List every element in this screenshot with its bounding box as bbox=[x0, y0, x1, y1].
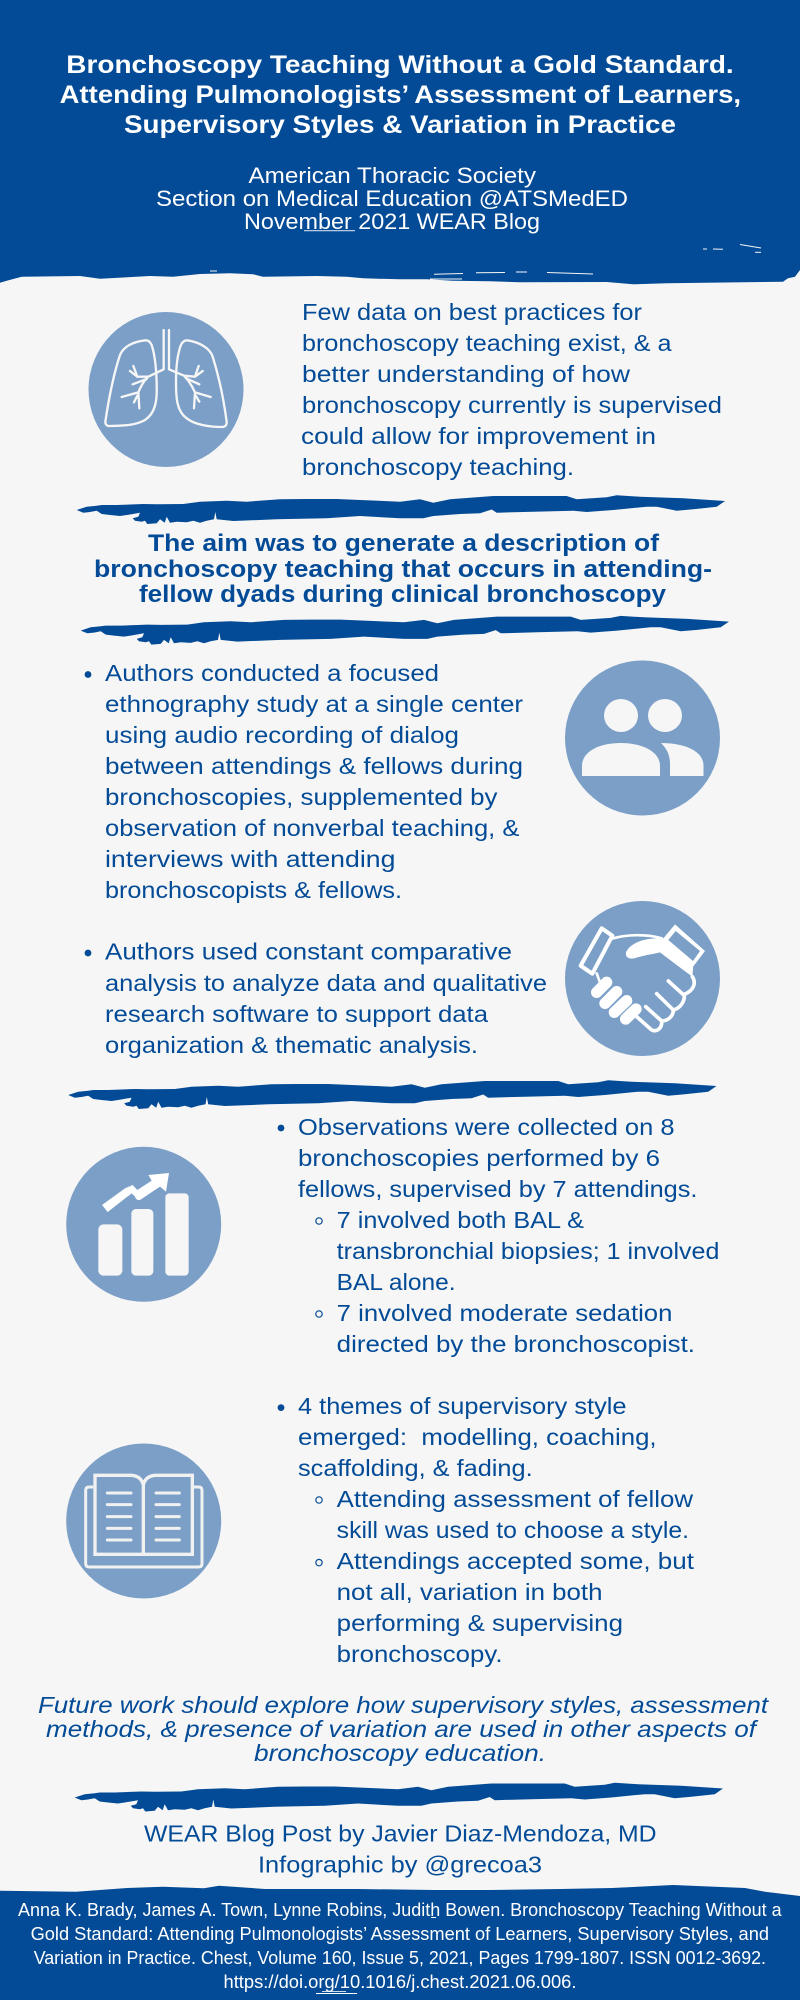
title bbox=[60, 51, 741, 139]
citation text: Gold Standard: Attending Pulmonologists’ Assessment of Learners, Supervisory Styles, and bbox=[31, 1924, 769, 1944]
subtitle: society and date bbox=[156, 163, 628, 234]
results bullet: observations: fellows, supervised by 7 attendings. bbox=[298, 1176, 697, 1202]
icon: open book bbox=[66, 1444, 221, 1598]
results bullet: observations: BAL alone. bbox=[337, 1269, 456, 1295]
methods bullet: analysis bbox=[85, 939, 547, 1058]
divider brush 1 bbox=[77, 495, 725, 524]
results bullet: observations: bronchoscopies performed by 6 bbox=[298, 1145, 660, 1171]
results bullet: themes: Attendings accepted some, but bbox=[337, 1548, 695, 1574]
results bullet: themes: bronchoscopy. bbox=[337, 1641, 502, 1667]
icon: rising bar chart bbox=[66, 1147, 221, 1302]
intro paragraph: bronchoscopy teaching exist, & a bbox=[302, 330, 672, 356]
future work statement: methods, & presence of variation are used in other aspects of bbox=[46, 1716, 759, 1742]
results bullet: themes: skill was used to choose a style. bbox=[337, 1517, 689, 1543]
methods bullet: ethnography: bronchoscopists & fellows. bbox=[105, 877, 402, 903]
future work statement bbox=[38, 1692, 770, 1766]
results bullet: observations: 7 involved moderate sedation bbox=[337, 1300, 672, 1326]
results bullet: themes: not all, variation in both bbox=[337, 1579, 602, 1605]
divider brush 4 bbox=[75, 1783, 723, 1812]
footer background with brushed edge bbox=[0, 1885, 800, 2000]
results bullet: themes bbox=[278, 1393, 695, 1667]
methods bullet: ethnography: bronchoscopies, supplemented by bbox=[105, 784, 498, 810]
results bullet: observations: Observations were collected on 8 bbox=[298, 1114, 674, 1140]
methods bullet: ethnography: interviews with attending bbox=[105, 846, 395, 872]
aim statement: The aim was to generate a description of bbox=[148, 530, 660, 557]
footer citation banner bbox=[0, 1885, 800, 2000]
results bullet: themes: Attending assessment of fellow bbox=[337, 1486, 693, 1512]
intro paragraph: bronchoscopy teaching. bbox=[302, 454, 574, 480]
future work statement: Future work should explore how supervisory styles, assessment bbox=[38, 1692, 770, 1718]
results bullet: themes: performing & supervising bbox=[337, 1610, 623, 1636]
methods section bbox=[85, 660, 720, 1058]
results bullet: themes: scaffolding, & fading. bbox=[298, 1455, 533, 1481]
icon: lungs bbox=[88, 312, 244, 467]
title: Bronchoscopy Teaching Without a Gold Standard. bbox=[66, 51, 734, 79]
results bullet: observations: 7 involved both BAL & bbox=[337, 1207, 584, 1233]
methods bullet: ethnography: observation of nonverbal teaching, & bbox=[105, 815, 519, 841]
header background with brushed edge bbox=[0, 0, 800, 284]
future work statement: bronchoscopy education. bbox=[254, 1740, 546, 1766]
citation text: https://doi.org/10.1016/j.chest.2021.06.006. bbox=[224, 1972, 576, 1992]
divider brush 2 bbox=[81, 616, 729, 645]
results bullet: observations: transbronchial biopsies; 1 involved bbox=[337, 1238, 719, 1264]
citation text: Anna K. Brady, James A. Town, Lynne Robins, Judith Bowen. Bronchoscopy Teaching Without a bbox=[18, 1900, 783, 1920]
credits: Infographic by @grecoa3 bbox=[258, 1852, 542, 1878]
methods bullet: analysis: analysis to analyze data and qualitative bbox=[105, 970, 547, 996]
results bullet: themes: emerged: modelling, coaching, bbox=[298, 1424, 657, 1450]
methods bullet: analysis: Authors used constant comparative bbox=[105, 939, 512, 965]
methods bullet: ethnography: using audio recording of dialog bbox=[105, 722, 459, 748]
citation text bbox=[18, 1900, 783, 1994]
results bullet: observations: directed by the bronchoscopist. bbox=[337, 1331, 695, 1357]
methods bullet: ethnography: between attendings & fellows during bbox=[105, 753, 523, 779]
methods bullet: ethnography: ethnography study at a single center bbox=[105, 691, 523, 717]
results section bbox=[66, 1114, 719, 1667]
intro section bbox=[88, 299, 722, 480]
methods bullet: analysis: organization & thematic analysis. bbox=[105, 1032, 478, 1058]
citation text: Variation in Practice. Chest, Volume 160, Issue 5, 2021, Pages 1799-1807. ISSN 0012-3692. bbox=[34, 1948, 766, 1968]
results bullet: observations bbox=[278, 1114, 719, 1357]
subtitle: society and date: November 2021 WEAR Blog bbox=[244, 209, 540, 234]
credits: WEAR Blog Post by Javier Diaz-Mendoza, MD bbox=[144, 1821, 657, 1847]
title: Supervisory Styles & Variation in Practice bbox=[124, 111, 676, 139]
subtitle: society and date: Section on Medical Education @ATSMedED bbox=[156, 186, 628, 211]
intro paragraph: better understanding of how bbox=[302, 361, 630, 387]
icon: two people bbox=[565, 660, 720, 816]
intro paragraph bbox=[301, 299, 722, 480]
header banner bbox=[0, 0, 800, 284]
title: Attending Pulmonologists’ Assessment of Learners, bbox=[60, 81, 741, 109]
intro paragraph: could allow for improvement in bbox=[301, 423, 656, 449]
aim statement bbox=[94, 530, 712, 608]
results bullet: themes: 4 themes of supervisory style bbox=[298, 1393, 626, 1419]
aim statement: fellow dyads during clinical bronchoscopy bbox=[139, 581, 667, 608]
aim statement: bronchoscopy teaching that occurs in attending- bbox=[94, 556, 712, 583]
methods bullet: ethnography: Authors conducted a focused bbox=[105, 660, 439, 686]
subtitle: society and date: American Thoracic Society bbox=[248, 163, 536, 188]
methods bullet: ethnography bbox=[85, 660, 523, 903]
divider brush 3 bbox=[68, 1080, 716, 1109]
intro paragraph: Few data on best practices for bbox=[302, 299, 642, 325]
methods bullet: analysis: research software to support data bbox=[105, 1001, 488, 1027]
credits bbox=[144, 1821, 657, 1878]
intro paragraph: bronchoscopy currently is supervised bbox=[302, 392, 722, 418]
icon: handshake bbox=[565, 901, 720, 1056]
